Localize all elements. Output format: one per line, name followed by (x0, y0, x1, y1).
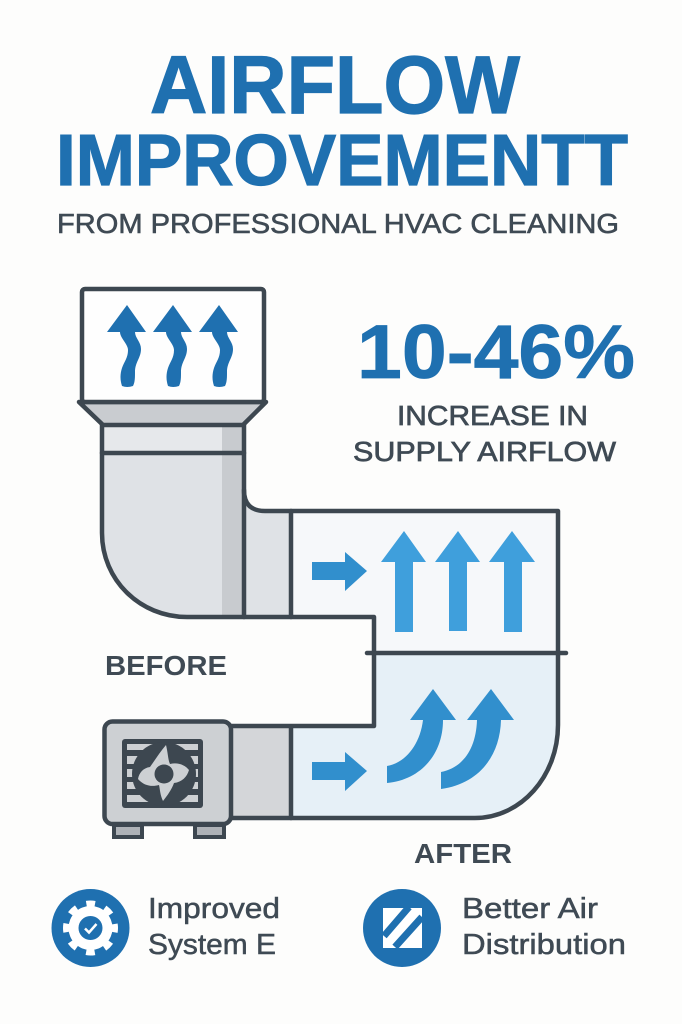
icon: after-duct straight arrows (381, 531, 535, 632)
statistic: airflow increase: SUPPLY AIRFLOW (353, 436, 617, 467)
supply register box (82, 289, 264, 402)
icon: air distribution (363, 889, 441, 967)
title: IMPROVEMENTT (56, 121, 628, 201)
text: better air distribution: Distribution (462, 929, 626, 961)
title (56, 40, 628, 201)
text: better air distribution: Better Air (462, 893, 598, 925)
icon: gear with check (52, 889, 130, 967)
label: before: BEFORE (105, 650, 227, 681)
icon: wavy up arrows in register (107, 305, 238, 387)
statistic: airflow increase (353, 310, 635, 467)
icon: inlet arrows (312, 552, 367, 791)
title: AIRFLOW (150, 40, 521, 131)
duct fills (79, 402, 558, 818)
text: improved system: System E (148, 929, 276, 961)
icon: curved arrows (387, 689, 514, 789)
duct outline (79, 402, 566, 818)
label: after: AFTER (414, 838, 512, 869)
text: improved system: Improved (148, 893, 280, 925)
subtitle: FROM PROFESSIONAL HVAC CLEANING (57, 208, 619, 239)
icon: outdoor unit (104, 722, 231, 837)
statistic: airflow increase: INCREASE IN (397, 400, 588, 431)
duct diagram (79, 289, 566, 837)
text: better air distribution (462, 893, 626, 961)
statistic: airflow increase: 10-46% (357, 310, 635, 395)
text: improved system (148, 893, 280, 961)
